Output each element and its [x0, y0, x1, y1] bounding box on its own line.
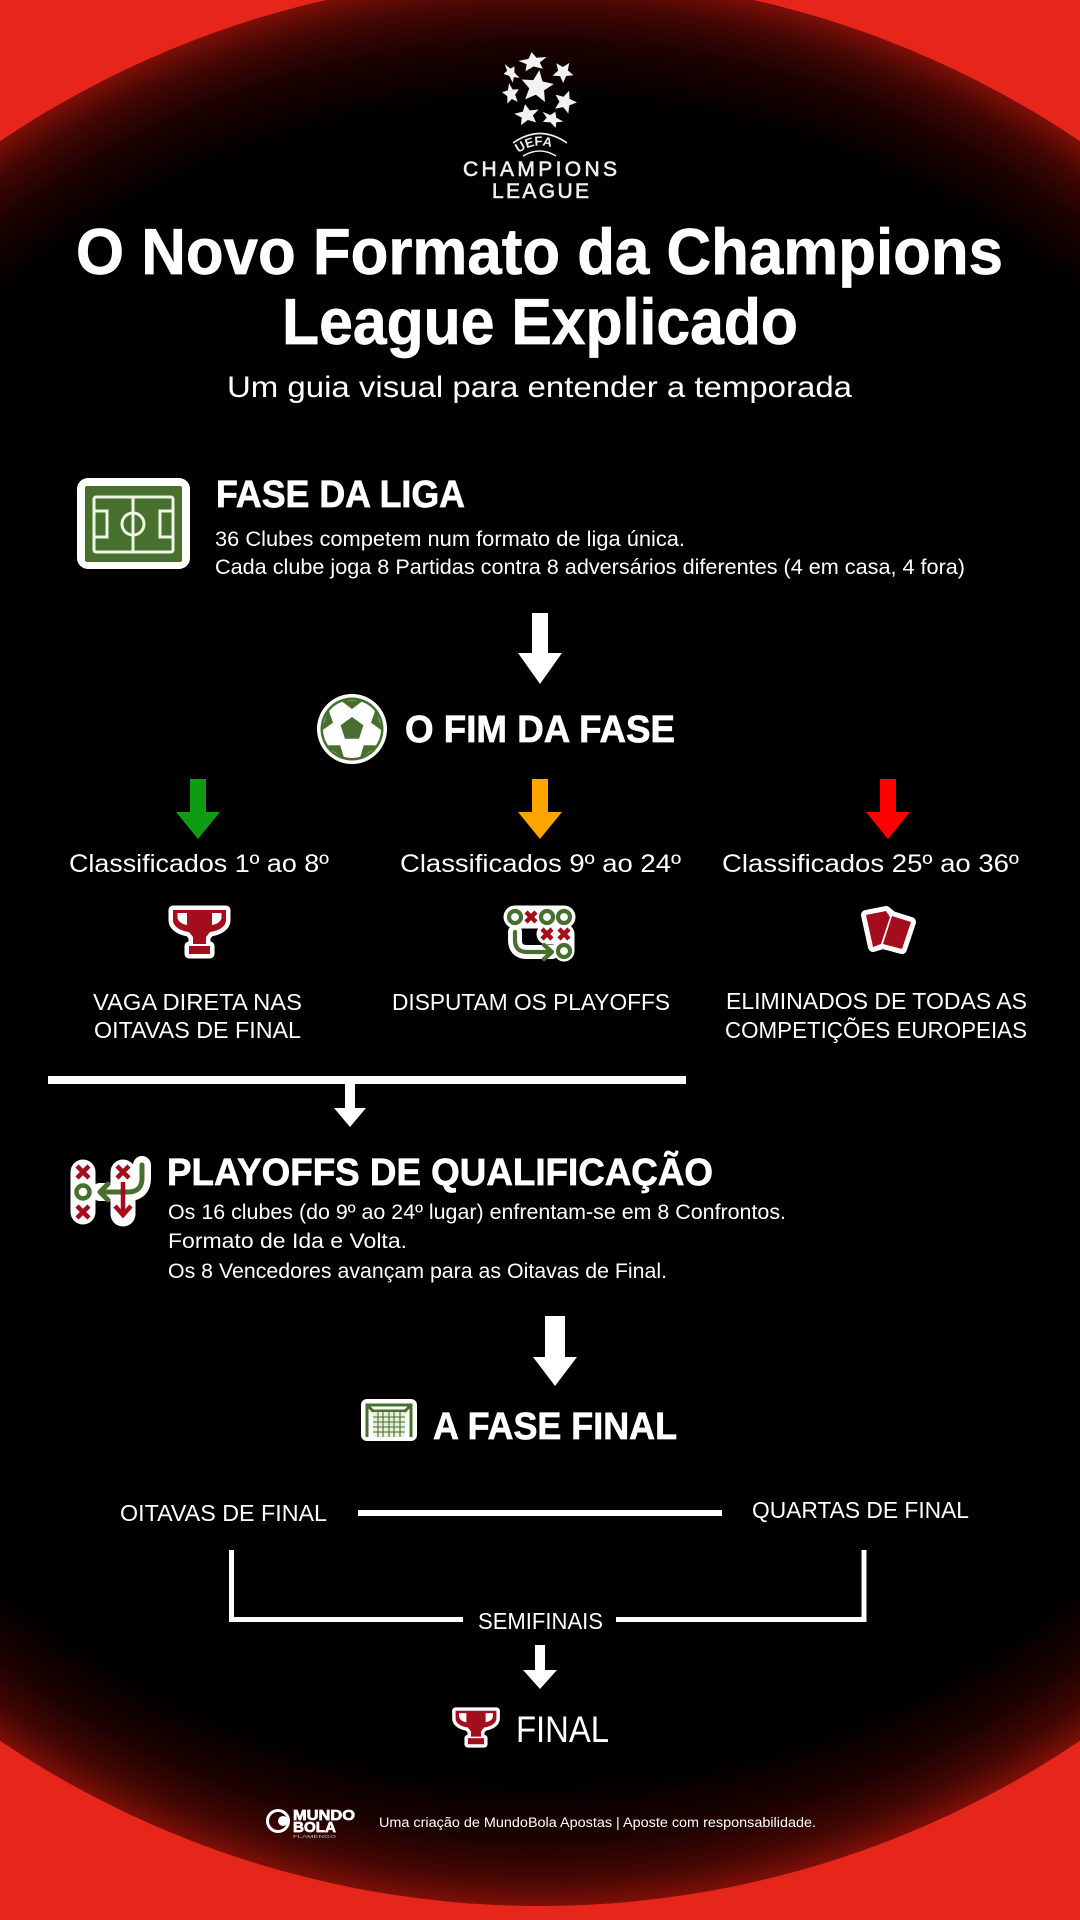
logo: MundoBola	[268, 1807, 355, 1839]
column: 25th to 36th	[722, 779, 1027, 1043]
text block	[215, 527, 965, 579]
title	[76, 215, 1003, 358]
text: COMPETIÇÕES EUROPEIAS	[725, 1016, 1027, 1043]
heading: O FIM DA FASE	[405, 709, 675, 751]
credit text: Uma criação de MundoBola Apostas | Aposte com responsabilidade.	[379, 1815, 816, 1830]
text block: Formato de Ida e Volta.	[168, 1230, 407, 1253]
arrow: green	[176, 779, 220, 839]
logo: UEFA Champions League	[463, 52, 617, 203]
arrow: orange	[518, 779, 562, 839]
label: Classificados 25º ao 36º	[722, 850, 1019, 878]
icon: football pitch	[77, 478, 190, 569]
text block: Os 8 Vencedores avançam para as Oitavas de Final.	[168, 1260, 667, 1283]
icon: starball	[499, 50, 580, 130]
text: OITAVAS DE FINAL	[94, 1017, 301, 1043]
text: DISPUTAM OS PLAYOFFS	[392, 989, 670, 1015]
label: semi finals: SEMIFINAIS	[478, 1608, 603, 1634]
text block: Os 16 clubes (do 9º ao 24º lugar) enfrentam-se em 8 Confrontos.	[168, 1201, 786, 1224]
column: top 8	[69, 779, 329, 1043]
title: O Novo Formato da Champions	[76, 215, 1003, 288]
arrow: red	[866, 779, 910, 839]
text block: Cada clube joga 8 Partidas contra 8 adversários diferentes (4 em casa, 4 fora)	[215, 555, 965, 579]
section heading: O Fim da Fase	[317, 694, 675, 764]
icon: trophy	[173, 910, 226, 954]
logo: UEFA Champions League: LEAGUE	[492, 180, 589, 203]
connector line with arrow	[48, 1076, 686, 1127]
heading: PLAYOFFS DE QUALIFICAÇÃO	[167, 1150, 713, 1194]
logo: MundoBola: FLAMENGO	[293, 1834, 337, 1839]
title: League Explicado	[282, 285, 798, 358]
section: Playoffs de Qualificação	[76, 1150, 786, 1283]
label: round of 16: OITAVAS DE FINAL	[120, 1500, 327, 1526]
icon: trophy	[456, 1711, 496, 1744]
text block: 36 Clubes competem num formato de liga única.	[215, 527, 685, 551]
arrow	[523, 1645, 557, 1689]
icon: tactics board	[509, 911, 570, 959]
text	[93, 989, 302, 1043]
section heading: A Fase Final	[361, 1399, 677, 1448]
bracket lines	[232, 1550, 864, 1620]
text block	[168, 1201, 786, 1283]
heading: A FASE FINAL	[433, 1406, 677, 1448]
subtitle: Um guia visual para entender a temporada	[227, 371, 852, 404]
footer	[268, 1807, 816, 1839]
icon: red cards	[866, 911, 911, 949]
icon: goal	[361, 1399, 417, 1441]
final	[456, 1709, 609, 1750]
icon: football	[317, 694, 387, 764]
logo: UEFA Champions League: UEFA	[514, 136, 551, 152]
label: Classificados 9º ao 24º	[400, 850, 681, 878]
column: 9th to 24th	[392, 779, 681, 1015]
heading: FASE DA LIGA	[216, 474, 465, 516]
section: Fase da Liga	[77, 474, 965, 579]
logo: UEFA Champions League: CHAMPIONS	[463, 158, 617, 181]
label: quarter finals: QUARTAS DE FINAL	[752, 1497, 969, 1523]
arrow	[533, 1316, 577, 1386]
knockout bracket	[120, 1497, 969, 1634]
connector	[358, 1510, 722, 1516]
text: VAGA DIRETA NAS	[93, 989, 302, 1015]
arrow	[518, 613, 562, 684]
label: Classificados 1º ao 8º	[69, 850, 329, 878]
text	[725, 988, 1027, 1043]
logo: MundoBola: MUNDO	[293, 1807, 355, 1824]
icon: playoff tactics	[76, 1165, 142, 1218]
text: ELIMINADOS DE TODAS AS	[726, 988, 1027, 1014]
heading: FINAL	[516, 1709, 609, 1750]
logo: MundoBola: BOLA	[293, 1819, 336, 1836]
